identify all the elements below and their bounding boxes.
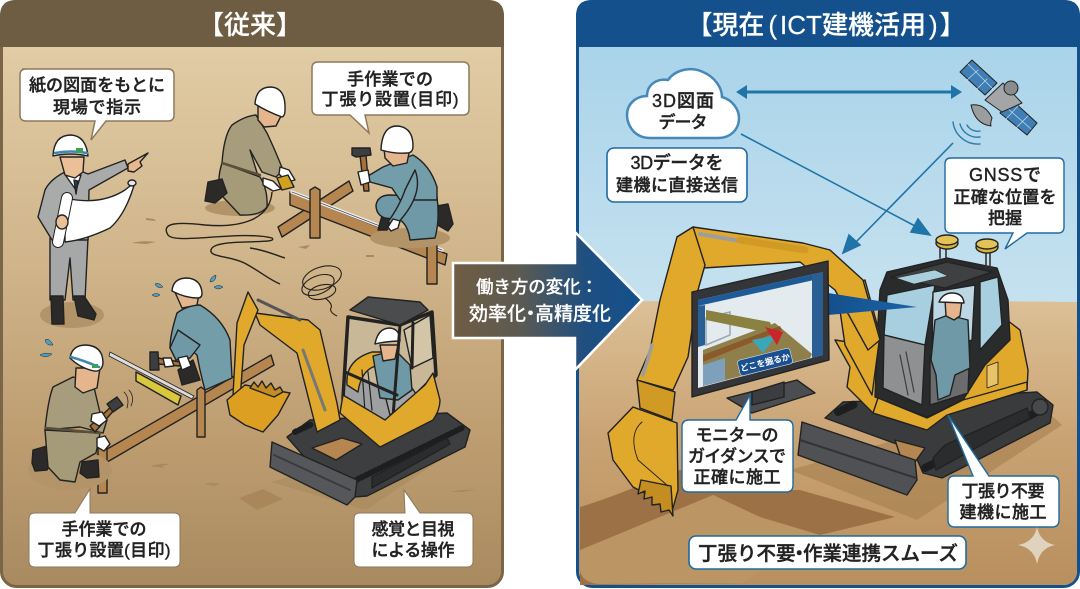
arrow: shift in ways of working: 働き方の変化： — [476, 277, 598, 297]
ground marks — [132, 218, 476, 492]
callout: manual staking, top: 丁張り設置(目印) — [322, 90, 458, 109]
callout: GNSS position: 正確な位置を — [954, 188, 1056, 207]
monitor: guidance display — [692, 261, 829, 413]
callout: manual staking, top: 手作業での — [347, 70, 433, 89]
excavator: ICT — [608, 227, 1062, 520]
coiled wire — [299, 261, 344, 316]
wood beam and post — [88, 355, 274, 472]
ruler and spirit level — [109, 352, 194, 405]
callout: monitor guidance: モニターの — [696, 426, 778, 445]
cloud: 3D drawing data: 3D図面 — [652, 91, 714, 111]
panel: conventional method — [0, 0, 504, 586]
label: where to dig: どこを掘るか — [739, 351, 791, 373]
callout: no stakes needed: 丁張り不要 — [962, 482, 1044, 501]
arrow: satellite to machine — [843, 143, 953, 253]
callout: manual staking, bottom: 丁張り設置(目印) — [38, 541, 170, 560]
sweat drops — [40, 275, 223, 357]
callout: send 3D data to machine — [607, 148, 747, 202]
worker: tan, measuring with tape — [205, 87, 295, 216]
excavation trench — [580, 470, 895, 585]
worker: blue, hammering stake — [352, 126, 453, 248]
callout: send 3D data to machine: 建機に直接送信 — [616, 176, 738, 195]
icon: sparkle — [1018, 527, 1055, 564]
callout: manual staking, top — [312, 62, 469, 133]
survey stakes and string line — [278, 181, 447, 284]
arrow: cloud to satellite — [736, 85, 962, 99]
callout: paper drawings: 紙の図面をもとに — [29, 76, 165, 95]
cloud: 3D drawing data — [627, 69, 739, 138]
icon: satellite — [953, 60, 1037, 144]
caption: no stakes, smooth coordination — [689, 536, 966, 569]
callout: paper drawings: 現場で指示 — [53, 98, 141, 117]
excavator: conventional — [227, 292, 470, 510]
callout: operation by feel and sight — [354, 490, 473, 567]
callout: GNSS position: GNSSで — [969, 165, 1041, 185]
worker: blue, hammering — [150, 278, 232, 390]
arrow: shift in ways of working — [453, 232, 642, 370]
screen — [698, 272, 823, 388]
callout: paper drawings — [20, 69, 174, 140]
ground patch — [239, 489, 283, 510]
foreman with blueprint — [38, 135, 148, 328]
heading: current: 【現在(ICT建機活用)】 — [686, 10, 966, 40]
worker: tan, kneeling with hammer — [28, 345, 133, 490]
header bar: conventional — [0, 0, 504, 47]
callout: no stakes needed: 建機に施工 — [960, 503, 1046, 522]
callout: send 3D data to machine: 3Dデータを — [630, 152, 724, 173]
callout: manual staking, bottom: 手作業での — [62, 520, 146, 539]
callout: GNSS position: 把握 — [988, 209, 1022, 228]
panel: current ICT method — [576, 0, 1080, 586]
callout: monitor guidance — [682, 395, 793, 492]
wedge: monitor view from cab — [828, 293, 917, 315]
callout: manual staking, bottom — [29, 489, 180, 567]
callout: monitor guidance: ガイダンスで — [688, 446, 786, 466]
callout: GNSS position — [945, 158, 1064, 249]
caption: no stakes, smooth coordination: 丁張り不要・作業連携スムーズ — [698, 542, 958, 565]
ground — [579, 300, 1077, 585]
cloud: 3D drawing data: データ — [658, 112, 708, 132]
post in foreground — [98, 442, 107, 493]
callout: operation by feel and sight: 感覚と目視 — [372, 520, 454, 539]
header bar: current — [576, 0, 1080, 47]
callout: no stakes needed — [948, 415, 1059, 527]
cable — [166, 192, 285, 284]
arrow: shift in ways of working: 効率化・高精度化 — [469, 303, 611, 325]
heading: conventional: 【従来】 — [198, 10, 302, 40]
callout: monitor guidance: 正確に施工 — [694, 468, 780, 487]
callout: operation by feel and sight: による操作 — [372, 541, 454, 560]
arrow: cloud to machine — [741, 134, 930, 235]
